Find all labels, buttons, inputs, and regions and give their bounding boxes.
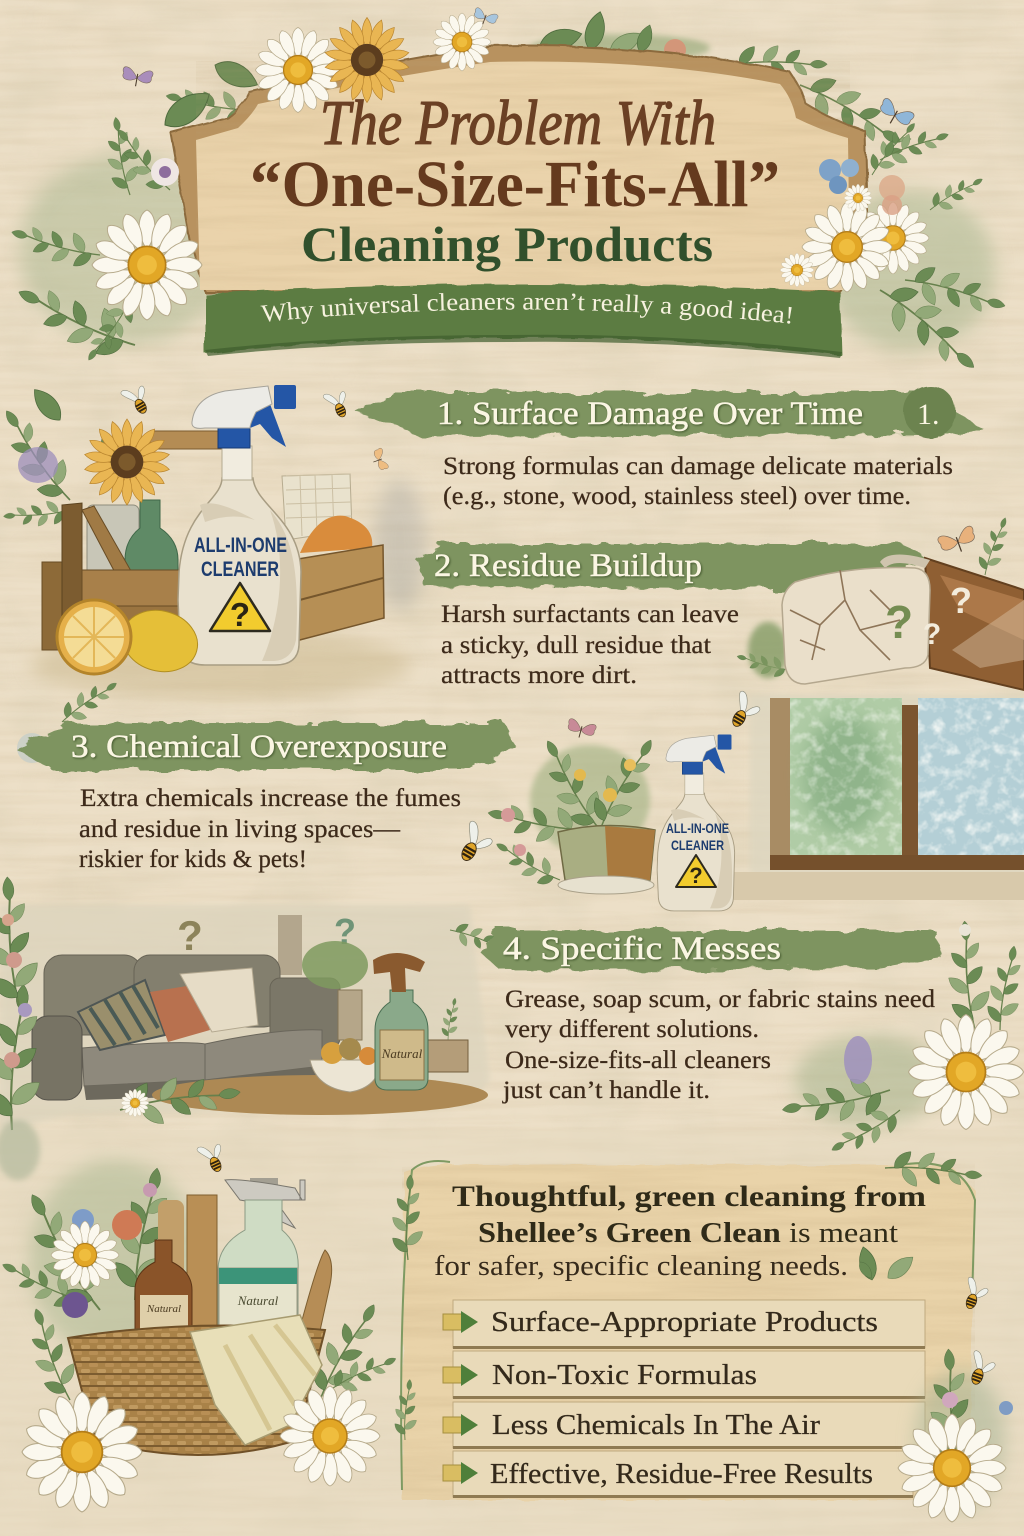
panel: green cleaning callout — [388, 1146, 984, 1500]
bees near caddy — [120, 381, 389, 472]
section 1 number badge: 1. — [917, 398, 940, 431]
section 3 body — [79, 785, 461, 873]
illustration: living room with sofa: ? — [177, 912, 203, 959]
icon: leaves — [856, 1245, 918, 1284]
illustration: small all-in-one bottle — [657, 735, 735, 911]
illustration: basket of green cleaning supplies — [0, 1139, 402, 1512]
checklist plaques: Less Chemicals In The Air — [492, 1409, 820, 1441]
checklist plaques — [443, 1300, 925, 1498]
header banner — [204, 284, 842, 358]
section 4 heading band — [446, 917, 942, 970]
checklist plaques: Effective, Residue-Free Results — [490, 1458, 873, 1490]
section 1 heading band — [355, 386, 985, 438]
section 3 heading band — [15, 671, 515, 770]
title: Cleaning Products — [301, 216, 713, 272]
bottle label: all-in-one: ? — [230, 596, 250, 633]
checklist plaques: Non-Toxic Formulas — [492, 1359, 757, 1391]
section 4 body: One-size-fits-all cleaners — [505, 1047, 771, 1074]
section 4 heading band: 4. Specific Messes — [503, 931, 781, 967]
illustration: small all-in-one bottle: CLEANER — [671, 837, 724, 853]
section 2 body: Harsh surfactants can leave — [441, 601, 739, 628]
illustration: living room with sofa: ? — [334, 911, 356, 952]
section 2 body — [441, 601, 739, 689]
illustration: caddy with all-in-one cleaner — [0, 384, 426, 700]
section 4 floral corner — [779, 919, 1024, 1165]
left vine — [0, 874, 244, 1180]
bottle label: all-in-one: CLEANER — [201, 558, 279, 581]
title — [250, 87, 780, 272]
section 4 body — [502, 986, 936, 1104]
section 1 body: Strong formulas can damage delicate materials — [443, 453, 953, 480]
section 3 body: riskier for kids & pets! — [79, 846, 307, 873]
illustration: small all-in-one bottle: ? — [689, 863, 703, 888]
header wooden sign — [171, 46, 868, 292]
title: The Problem With — [320, 87, 716, 158]
callout heading: for safer, specific cleaning needs. — [434, 1251, 848, 1282]
banner subtitle: Why universal cleaners aren’t really a good idea! — [260, 293, 792, 324]
bottle label: all-in-one — [194, 534, 287, 633]
illustration: damaged stone and wood — [734, 513, 1024, 690]
bottle label: all-in-one: ALL-IN-ONE — [194, 534, 287, 557]
checklist plaques: Surface-Appropriate Products — [491, 1306, 878, 1338]
callout heading: Shellee’s Green Clean is meant — [478, 1217, 898, 1249]
section 2 body: attracts more dirt. — [441, 662, 637, 689]
illustration: living room with sofa — [0, 905, 490, 1130]
section 1 number badge — [904, 386, 956, 438]
illustration: potted plant — [452, 690, 764, 895]
header flowers — [92, 7, 929, 320]
section 1 body: (e.g., stone, wood, stainless steel) over time. — [443, 483, 911, 510]
header foliage — [6, 9, 1011, 386]
title: “One-Size-Fits-All” — [250, 148, 780, 221]
section 4 body: just can’t handle it. — [502, 1077, 710, 1104]
callout heading: Thoughtful, green cleaning from — [452, 1180, 926, 1213]
illustration: damaged stone and wood: ? — [885, 596, 913, 648]
illustration: damaged stone and wood: ? — [923, 618, 941, 651]
section 3 body: and residue in living spaces— — [79, 816, 401, 843]
section 1 body — [443, 453, 953, 510]
section 4 body: Grease, soap scum, or fabric stains need — [505, 986, 936, 1013]
illustration: window — [700, 695, 1024, 900]
illustration: basket of green cleaning supplies: Natural — [146, 1303, 181, 1315]
section 4 body: very different solutions. — [505, 1016, 759, 1043]
section 2 heading band: 2. Residue Buildup — [434, 548, 702, 584]
illustration: damaged stone and wood: ? — [950, 580, 972, 621]
illustration: living room with sofa: Natural — [381, 1046, 423, 1061]
bottom right floral corner — [898, 1277, 1013, 1522]
callout heading — [434, 1180, 926, 1282]
section 3 body: Extra chemicals increase the fumes — [80, 785, 461, 812]
illustration: basket of green cleaning supplies: Natural — [237, 1293, 279, 1308]
section 2 heading band — [418, 544, 925, 590]
illustration: small all-in-one bottle: ALL-IN-ONE — [666, 820, 729, 836]
section 3 heading band: 3. Chemical Overexposure — [71, 729, 447, 765]
section 1 heading band: 1. Surface Damage Over Time — [437, 396, 863, 432]
section 2 body: a sticky, dull residue that — [441, 632, 711, 659]
